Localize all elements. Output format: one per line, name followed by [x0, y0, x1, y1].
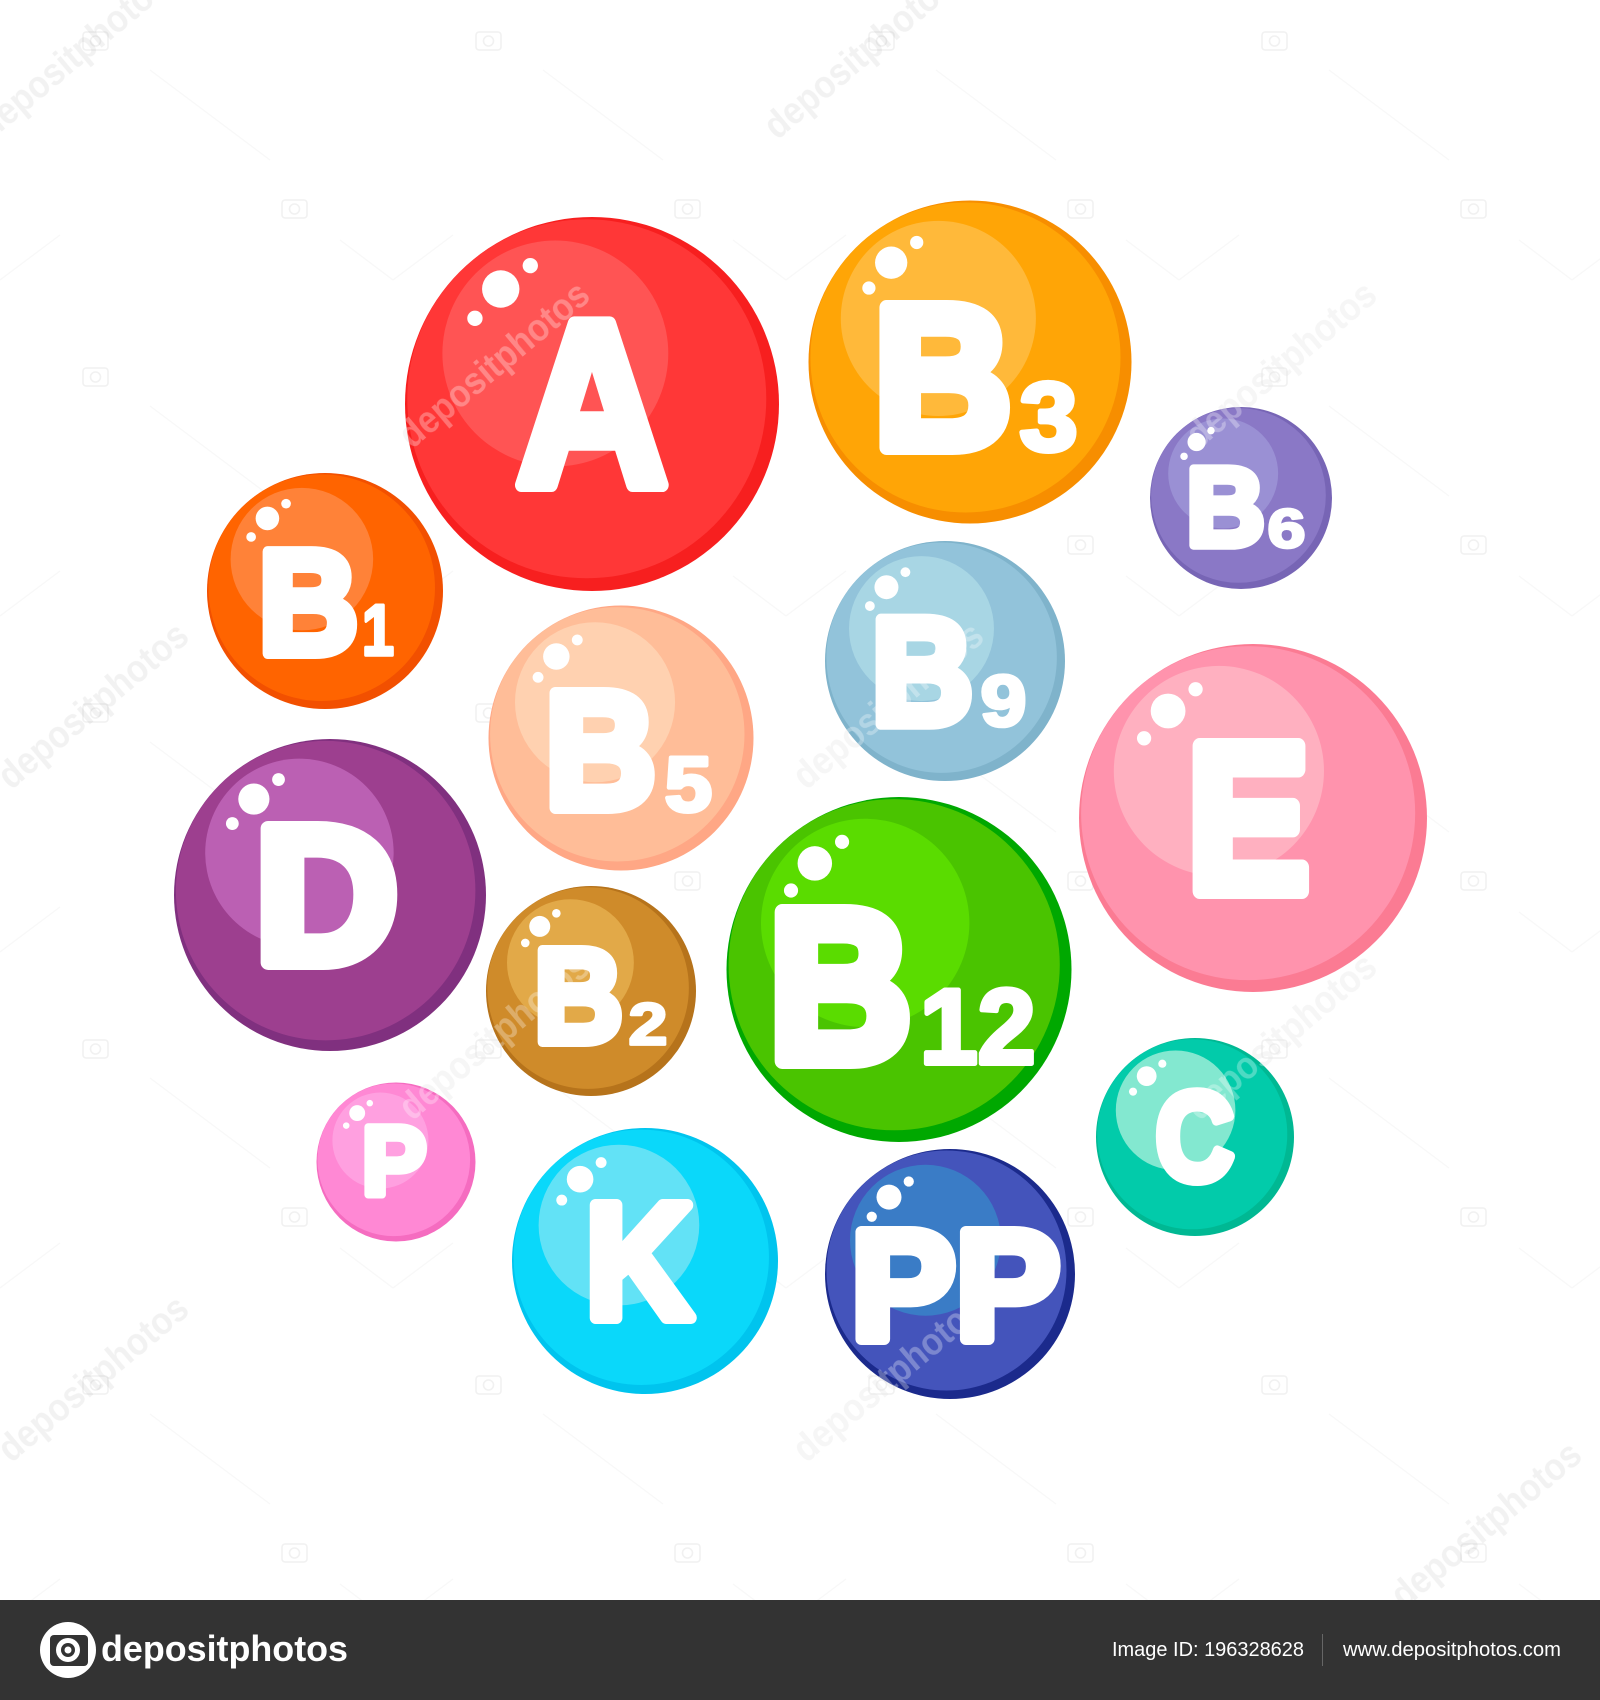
bubble: vitamin B6 — [1150, 407, 1332, 589]
bubble: vitamin B2 — [486, 886, 696, 1096]
watermarks on background: depositphotos — [391, 945, 598, 1128]
bubble: vitamin B9: B — [872, 587, 973, 757]
bubble: vitamin B5: B — [545, 658, 656, 844]
bubble: vitamin B9 — [825, 541, 1065, 781]
footer image id: Image ID: 196328628 — [1112, 1639, 1304, 1661]
watermarks over bubbles: depositphotos — [1178, 945, 1385, 1128]
footer logo icon: camera — [40, 1622, 96, 1678]
watermarks on background: depositphotos — [785, 1287, 992, 1470]
bubble: vitamin B6: B — [1186, 446, 1265, 570]
bubble: vitamin C — [1096, 1038, 1294, 1236]
watermarks over bubbles: depositphotos — [785, 614, 992, 797]
bubble: vitamin A — [405, 217, 779, 591]
bubble: vitamin B12: B — [769, 866, 911, 1107]
bubble: vitamin B3 — [808, 200, 1132, 524]
bubble: vitamin D: D — [255, 788, 398, 1004]
watermarks on background: depositphotos — [1178, 945, 1385, 1128]
bubble: vitamin B3: B — [874, 264, 1012, 492]
watermarks on background: depositphotos — [391, 273, 598, 456]
bubble: vitamin C: C — [1156, 1068, 1234, 1207]
bubble: vitamin K — [512, 1128, 778, 1394]
bubble: vitamin E — [1079, 644, 1427, 992]
watermarks over bubbles: depositphotos — [391, 273, 598, 456]
bubble: vitamin B1: B — [258, 520, 358, 686]
bubble: vitamin B12 — [726, 797, 1072, 1142]
bubble: vitamin P — [316, 1082, 476, 1242]
bubble: vitamin A: A — [516, 272, 668, 535]
bubble: vitamin K: K — [586, 1170, 692, 1353]
bubble: vitamin B5: 5 — [665, 740, 712, 828]
bubble: vitamin B1: 1 — [362, 591, 394, 671]
footer bar — [0, 1600, 1600, 1700]
watermarks over bubbles — [391, 273, 1385, 1470]
bubble: vitamin B2: B — [534, 922, 623, 1071]
watermarks on background: depositphotos — [1178, 273, 1385, 456]
bubble: vitamin B6: 6 — [1268, 498, 1306, 560]
bubble: vitamin B5 — [488, 606, 754, 870]
bubble: vitamin D — [174, 739, 486, 1051]
watermarks over bubbles: depositphotos — [391, 945, 598, 1128]
bubble: vitamin P: P — [362, 1106, 427, 1216]
bubble: vitamin B9: 9 — [980, 662, 1026, 742]
bubble: vitamin PP: PP — [851, 1198, 1060, 1372]
bubble: vitamin B3: 3 — [1020, 362, 1078, 472]
bubble: vitamin B12: 12 — [920, 966, 1036, 1086]
bubble: vitamin E: E — [1187, 700, 1309, 936]
footer website: www.depositphotos.com — [1342, 1639, 1561, 1661]
watermarks on background: depositphotos — [785, 614, 992, 797]
watermarks over bubbles: depositphotos — [785, 1287, 992, 1470]
bubble: vitamin B1 — [207, 473, 443, 709]
footer logo text: depositphotos — [101, 1628, 348, 1669]
watermarks over bubbles: depositphotos — [1178, 273, 1385, 456]
bubble: vitamin B2: 2 — [628, 992, 668, 1058]
bubble: vitamin PP — [825, 1149, 1075, 1399]
